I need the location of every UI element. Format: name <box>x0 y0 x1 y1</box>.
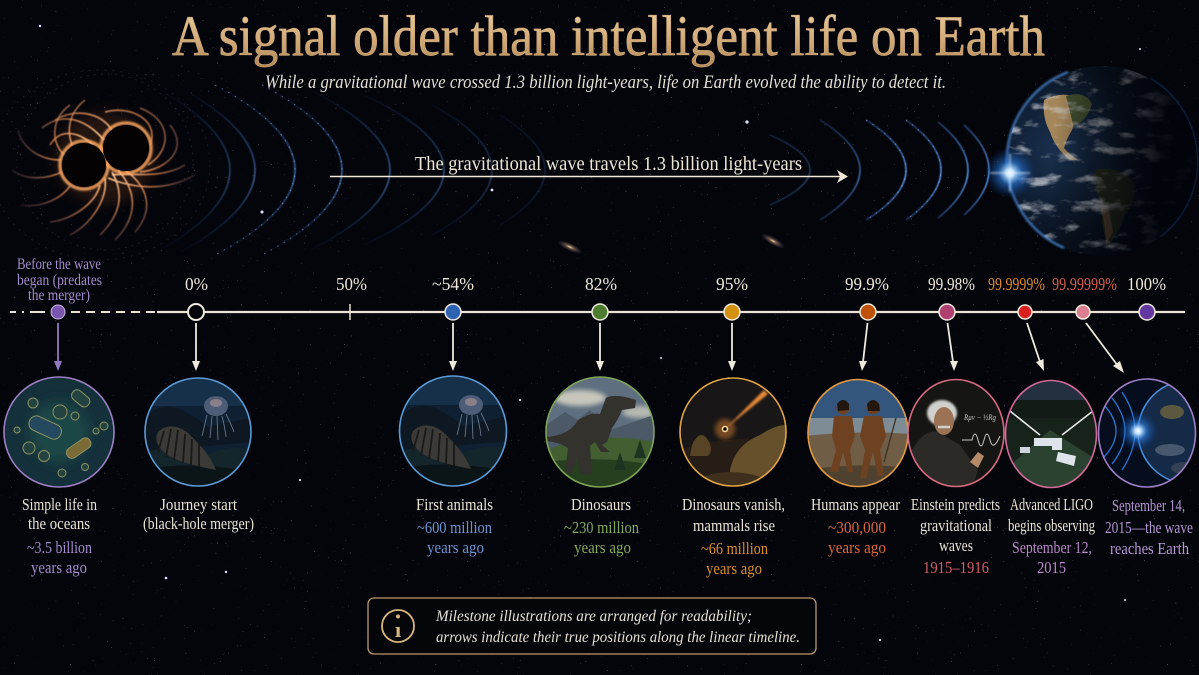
milestone caption: dinosaurs vanish: years ago <box>706 559 762 578</box>
milestone caption: first animals <box>416 495 493 557</box>
milestone caption: humans appear: ~300,000 <box>828 518 886 537</box>
milestone caption: first animals: First animals <box>416 495 493 514</box>
illustration: dinosaurs <box>546 377 658 487</box>
milestone caption: wave reaches Earth: reaches Earth <box>1110 539 1190 558</box>
subtitle: While a gravitational wave crossed 1.3 billion light-years, life on Earth evolved the ability to detect it. <box>265 73 946 93</box>
milestone caption: dinosaurs vanish <box>682 495 785 578</box>
milestone caption: simple life: Simple life in <box>22 495 97 514</box>
label: before the wave began: Before the wave <box>17 256 101 273</box>
milestone caption: simple life: the oceans <box>28 514 90 533</box>
milestone caption: journey start <box>143 495 254 533</box>
illustration: Einstein at the chalkboard: Rμν − ½Rg <box>963 413 996 422</box>
milestone caption: humans appear: Humans appear <box>811 495 900 514</box>
milestone caption: dinosaurs: Dinosaurs <box>571 495 631 514</box>
milestone caption: first animals: years ago <box>427 538 484 557</box>
callout: illustration note: Milestone illustrations are arranged for readability; <box>435 608 752 625</box>
marker: Einstein <box>939 304 955 320</box>
milestone caption: humans appear: years ago <box>828 538 886 557</box>
milestone caption: Advanced LIGO <box>1008 495 1095 577</box>
milestone caption: dinosaurs: years ago <box>574 538 631 557</box>
milestone caption: simple life: ~3.5 billion <box>27 538 92 557</box>
marker: humans <box>860 304 876 320</box>
milestone caption: simple life: years ago <box>31 558 87 577</box>
milestone caption: Einstein: 1915–1916 <box>923 558 989 577</box>
marker: dinosaurs <box>592 304 608 320</box>
milestone caption: simple life <box>22 495 97 577</box>
marker: first animals <box>445 304 461 320</box>
pointer arrows from timeline to illustrations <box>54 323 1124 373</box>
marker: 0% <box>188 304 204 320</box>
timeline percentage labels: ~54% <box>432 274 474 294</box>
icon: information: ı <box>395 617 401 642</box>
illustration: early humans <box>806 378 910 488</box>
label: before the wave began: the merger) <box>28 287 90 304</box>
timeline percentage labels: 95% <box>716 274 748 294</box>
milestone caption: journey start: (black-hole merger) <box>143 514 254 533</box>
timeline percentage labels: 99.98% <box>928 274 975 294</box>
milestone caption: Einstein: Einstein predicts <box>911 495 1000 514</box>
timeline percentage labels <box>185 274 1166 294</box>
milestone caption: dinosaurs vanish: ~66 million <box>701 539 768 558</box>
marker: Advanced LIGO <box>1018 305 1032 319</box>
milestone caption: wave reaches Earth <box>1105 496 1193 558</box>
milestone caption: Advanced LIGO: begins observing <box>1008 516 1095 535</box>
milestone caption: Einstein <box>911 495 1000 577</box>
milestone caption: Advanced LIGO: Advanced LIGO <box>1010 495 1093 514</box>
illustration: Advanced LIGO observatory <box>1005 380 1097 490</box>
wave distance label and arrow: The gravitational wave travels 1.3 billion light-years <box>415 153 802 175</box>
illustration: dinosaur extinction and rise of mammals <box>680 378 786 486</box>
illustration: black-hole merger with spiralling orange waves <box>0 49 218 275</box>
illustration: simple life in the oceans <box>0 375 118 490</box>
timeline percentage labels: 50% <box>336 274 367 294</box>
illustration: first animals <box>397 375 509 487</box>
illustration: distant galaxies <box>556 231 787 257</box>
milestone caption: dinosaurs: ~230 million <box>564 518 639 537</box>
title: A signal older than intelligent life on Earth <box>172 5 1045 68</box>
label: before the wave began <box>17 256 102 304</box>
timeline percentage labels: 99.9999% <box>988 274 1045 294</box>
timeline percentage labels: 0% <box>185 274 208 294</box>
marker: detection <box>1076 305 1090 319</box>
timeline percentage labels: 82% <box>585 274 617 294</box>
icon: information <box>382 610 414 642</box>
marker: 100% <box>1139 304 1155 320</box>
milestone caption: dinosaurs <box>564 495 639 557</box>
wave distance label and arrow <box>330 153 848 183</box>
milestone caption: humans appear <box>811 495 900 557</box>
milestone caption: first animals: ~600 million <box>417 518 492 537</box>
timeline percentage labels: 99.9% <box>845 274 889 294</box>
illustration: gravitational wave fronts <box>160 85 1010 255</box>
milestone caption: Advanced LIGO: 2015 <box>1037 558 1066 577</box>
illustration: wave reaches Earth <box>1097 378 1199 488</box>
illustration: journey start, ancient sea creatures <box>142 376 254 488</box>
linear timeline <box>10 304 1185 320</box>
illustration: Earth with wave impact flare <box>984 60 1199 260</box>
milestone caption: dinosaurs vanish: Dinosaurs vanish, <box>682 495 785 514</box>
milestone caption: dinosaurs vanish: mammals rise <box>693 516 775 535</box>
marker: mass extinction <box>724 304 740 320</box>
milestone caption: Advanced LIGO: September 12, <box>1012 538 1092 557</box>
callout: illustration note: arrows indicate their true positions along the linear timeline. <box>436 629 800 646</box>
milestone caption: Einstein: waves <box>939 536 973 555</box>
callout: illustration note <box>368 598 816 654</box>
marker: before the wave <box>51 305 65 319</box>
milestone caption: journey start: Journey start <box>160 495 237 514</box>
label: before the wave began: began (predates <box>17 272 102 289</box>
milestone caption: Einstein: gravitational <box>920 516 992 535</box>
timeline percentage labels: 100% <box>1127 274 1166 294</box>
timeline percentage labels: 99.99999% <box>1052 274 1117 294</box>
illustration: Einstein at the chalkboard <box>906 378 1006 488</box>
